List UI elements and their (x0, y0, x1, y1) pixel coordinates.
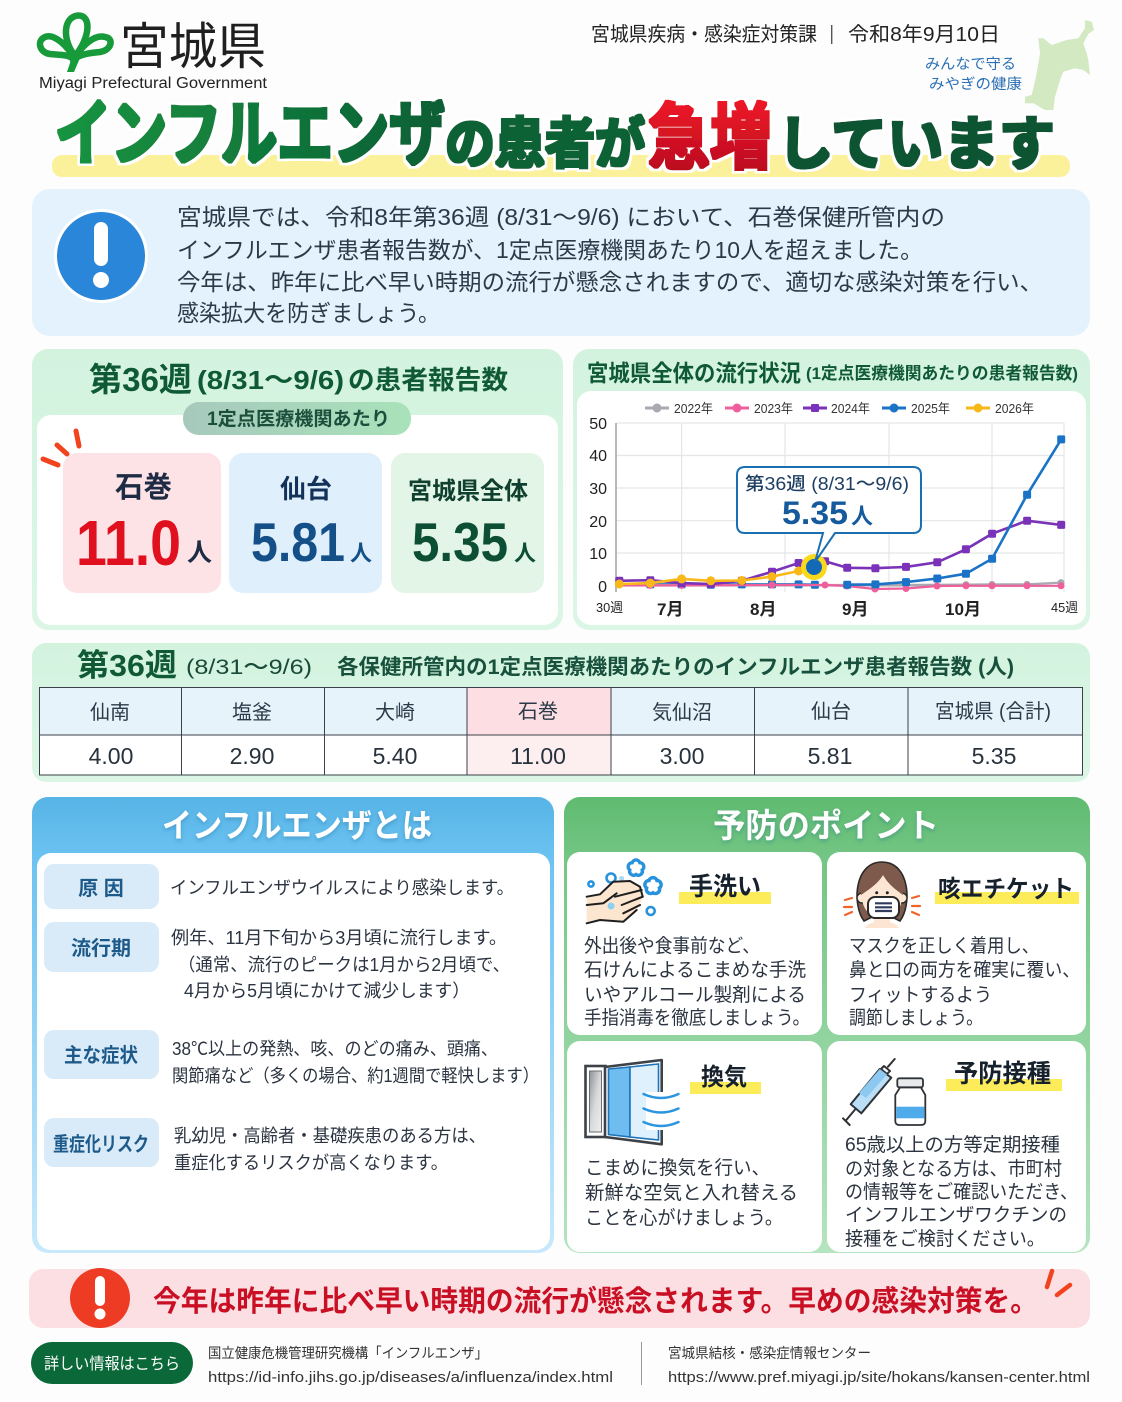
button: more information: 詳しい情報はこちら (44, 1355, 180, 1373)
text: ventilation: こまめに換気を行い、 (585, 1157, 770, 1179)
heading: vaccination: 予防接種 (954, 1060, 1051, 1088)
line chart: 30 (589, 481, 607, 498)
icon: red exclamation (70, 1268, 130, 1328)
text: vaccination: の情報等をご確認いただき、 (845, 1181, 1078, 1203)
line chart: 8月 (750, 600, 776, 619)
row: epidemic season (44, 922, 510, 1001)
text: cough etiquette: マスクを正しく着用し、 (849, 935, 1039, 957)
table heading (77, 648, 1014, 683)
alert text: インフルエンザ患者報告数が、1定点医療機関あたり10人を超えました。 (177, 237, 923, 263)
text: cough etiquette: フィットするよう (849, 985, 992, 1006)
heading: (8/31～9/6) (197, 365, 344, 395)
table: 石巻 (518, 700, 558, 723)
title: の患者が (445, 113, 645, 175)
row: cause (44, 864, 514, 909)
issuer and date: 令和8年9月10日 (848, 23, 1000, 46)
card: Ishinomaki: 石巻 (115, 471, 172, 504)
alert text: 今年は、昨年に比べ早い時期の流行が懸念されますので、適切な感染対策を行い、 (177, 269, 1043, 295)
card: Ishinomaki: 11.0 (76, 507, 181, 579)
text: cough etiquette (849, 935, 1080, 1029)
card: Miyagi overall: 宮城県全体 (408, 477, 528, 505)
row: epidemic season: （通常、流行のピークは1月から2月頃で、 (178, 955, 510, 975)
row: severe risk: 重症化リスク (53, 1133, 149, 1156)
heading (89, 361, 508, 398)
card: hand washing (567, 852, 822, 1035)
row: severe risk: 重症化するリスクが高くなります。 (174, 1153, 448, 1173)
text: vaccination: 65歳以上の方等定期接種 (845, 1134, 1060, 1156)
chart heading (587, 360, 1078, 386)
line chart: 50 (589, 416, 607, 433)
icon: open window (586, 1060, 678, 1144)
row: epidemic season: 例年、11月下旬から3月頃に流行します。 (171, 928, 507, 948)
line chart: 30週 (596, 600, 623, 615)
table heading: 第36週 (77, 648, 177, 683)
card: Miyagi overall: 人 (514, 541, 536, 566)
tagline: みんなで守る (925, 56, 1016, 73)
table: 大崎 (375, 701, 415, 724)
card: cough etiquette (827, 852, 1086, 1035)
callout: week 36 value: 5.35 (782, 495, 848, 531)
panel: weekly patient reports (32, 349, 563, 630)
highlighted point: week 36 (801, 554, 827, 580)
card: Sendai (229, 453, 382, 593)
table: 仙台 (811, 700, 851, 723)
card: Sendai: 人 (350, 541, 372, 566)
table (39, 687, 1083, 775)
row: cause: インフルエンザウイルスにより感染します。 (170, 878, 514, 898)
table heading: 各保健所管内の1定点医療機関あたりのインフルエンザ患者報告数 (人) (337, 655, 1014, 679)
chart legend: 2022年 (674, 401, 713, 416)
link: Miyagi infection information center: https://www.pref.miyagi.jp/site/hokans/kansen-center.html (668, 1369, 1090, 1386)
chart heading: 宮城県全体の流行状況 (587, 360, 801, 386)
text: ventilation (585, 1157, 798, 1229)
row: severe risk (44, 1118, 486, 1173)
alert text (177, 204, 1043, 326)
card: Ishinomaki: 人 (187, 539, 212, 567)
line chart: 9月 (842, 600, 868, 619)
table: 塩釜 (232, 701, 272, 724)
text: hand washing (584, 935, 810, 1029)
button: more information (31, 1342, 193, 1384)
title: しています (777, 112, 1055, 177)
text: vaccination: の対象となる方は、市町村 (845, 1158, 1062, 1180)
row: cause: 原 因 (78, 878, 124, 900)
text: cough etiquette: 調節しましょう。 (849, 1007, 983, 1029)
table: 4.00 (89, 743, 133, 769)
card: Miyagi overall (391, 453, 544, 593)
chart legend: 2023年 (754, 401, 793, 416)
table: 5.35 (972, 743, 1016, 769)
card: Sendai: 仙台 (280, 474, 332, 504)
chart legend (645, 401, 1034, 416)
pill: per sentinel institution: 1定点医療機関あたり (207, 408, 390, 430)
line chart: 7月 (657, 600, 683, 619)
tagline: みやぎの健康 (929, 76, 1022, 93)
title (55, 95, 1055, 179)
text: ventilation: 新鮮な空気と入れ替える (585, 1182, 798, 1204)
callout: week 36 value: 第36週 (8/31～9/6) (745, 474, 909, 494)
issuer and date (591, 23, 1000, 46)
heading: 予防のポイント (713, 807, 939, 844)
issuer and date: 宮城県疾病・感染症対策課 (591, 23, 817, 46)
callout: week 36 value (737, 467, 921, 562)
heading: インフルエンザとは (162, 807, 432, 844)
icon: syringe and vial (843, 1059, 925, 1125)
line chart: 10月 (945, 600, 981, 619)
table: 気仙沼 (652, 701, 712, 724)
row: symptoms: 38℃以上の発熱、咳、のどの痛み、頭痛、 (172, 1039, 498, 1059)
panel: what is influenza (32, 797, 554, 1253)
text: cough etiquette: 鼻と口の両方を確実に覆い、 (849, 959, 1080, 981)
card: Ishinomaki (63, 453, 221, 593)
chart legend: 2024年 (831, 401, 870, 416)
line chart: 45週 (1051, 600, 1078, 615)
table: 宮城県 (合計) (935, 700, 1051, 723)
table: 5.81 (808, 743, 852, 769)
icon: prefectural emblem (40, 15, 111, 72)
icon: person wearing mask (844, 862, 920, 928)
alert text: 宮城県では、令和8年第36週 (8/31～9/6) において、石巻保健所管内の (177, 204, 945, 230)
title: 急増 (648, 99, 772, 179)
text: ventilation: ことを心がけましょう。 (585, 1207, 783, 1229)
icon: exclamation (54, 209, 148, 303)
icon: red burst (43, 431, 79, 465)
line chart: 20 (589, 514, 607, 531)
text: hand washing: 石けんによるこまめな手洗 (584, 959, 806, 981)
callout: week 36 value: 人 (851, 504, 873, 529)
alert text: 感染拡大を防ぎましょう。 (177, 300, 440, 326)
text: hand washing: 手指消毒を徹底しましょう。 (584, 1007, 810, 1029)
row: symptoms (44, 1030, 539, 1086)
panel: alert message (32, 189, 1090, 336)
pill: per sentinel institution (183, 402, 411, 435)
heading: ventilation: 換気 (701, 1064, 747, 1091)
text: vaccination: インフルエンザワクチンの (845, 1204, 1067, 1226)
link: JIHS (208, 1345, 613, 1386)
row: symptoms: 主な症状 (64, 1044, 138, 1067)
chart heading: (1定点医療機関あたりの患者報告数) (806, 364, 1078, 383)
heading: 第36週 (89, 361, 192, 398)
icon: burst (1047, 1271, 1070, 1295)
logo wordmark: 宮城県 (120, 19, 266, 75)
table heading: (8/31～9/6) (186, 656, 312, 679)
text: hand washing: 外出後や食事前など、 (584, 935, 760, 957)
card: Sendai: 5.81 (251, 511, 345, 573)
line chart: 10 (589, 546, 607, 563)
line chart (589, 416, 1078, 619)
text: hand washing: いやアルコール製剤による (584, 984, 806, 1006)
title: インフルエンザ (55, 95, 445, 175)
panel: prevention points (564, 797, 1090, 1253)
tagline (925, 56, 1022, 93)
link: JIHS: https://id-info.jihs.go.jp/diseases/a/influenza/index.html (208, 1369, 613, 1386)
line chart: 40 (589, 448, 607, 465)
heading: cough etiquette: 咳エチケット (938, 876, 1074, 903)
row: severe risk: 乳幼児・高齢者・基礎疾患のある方は、 (174, 1126, 486, 1146)
title band (52, 155, 1070, 177)
heading: の患者報告数 (348, 365, 508, 395)
link: Miyagi infection information center (668, 1345, 1090, 1386)
text: vaccination (845, 1134, 1078, 1250)
row: epidemic season: 流行期 (71, 937, 131, 960)
icon: Miyagi map silhouette (1025, 20, 1094, 110)
row: epidemic season: 4月から5月頃にかけて減少します） (184, 981, 470, 1001)
card: Miyagi overall: 5.35 (412, 511, 508, 573)
link: JIHS: 国立健康危機管理研究機構「インフルエンザ」 (208, 1345, 488, 1361)
table: 2.90 (230, 743, 274, 769)
table: 5.40 (373, 743, 417, 769)
row: symptoms: 関節痛など（多くの場合、約1週間で軽快します） (172, 1066, 539, 1086)
card: ventilation (567, 1041, 822, 1252)
heading: ventilation (690, 1064, 761, 1094)
chart legend: 2025年 (911, 401, 950, 416)
logo English name: Miyagi Prefectural Government (39, 75, 268, 92)
icon: washing hands (587, 860, 661, 923)
heading: hand washing: 手洗い (689, 873, 761, 901)
panel: reports per health center (32, 643, 1090, 782)
text: vaccination: 接種をご検討ください。 (845, 1228, 1045, 1250)
banner: early infection control (29, 1268, 1090, 1328)
panel: prefecture-wide trend (573, 349, 1090, 630)
table: 仙南 (90, 701, 130, 724)
line chart: 0 (598, 579, 607, 596)
logo: Miyagi Prefectural Government (39, 15, 268, 92)
table: 11.00 (510, 743, 566, 769)
link: Miyagi infection information center: 宮城県結核・感染症情報センター (668, 1345, 871, 1361)
card: vaccination (827, 1041, 1086, 1252)
banner text: 今年は昨年に比べ早い時期の流行が懸念されます。早めの感染対策を。 (153, 1284, 1038, 1318)
table: 3.00 (660, 743, 704, 769)
chart legend: 2026年 (995, 401, 1034, 416)
